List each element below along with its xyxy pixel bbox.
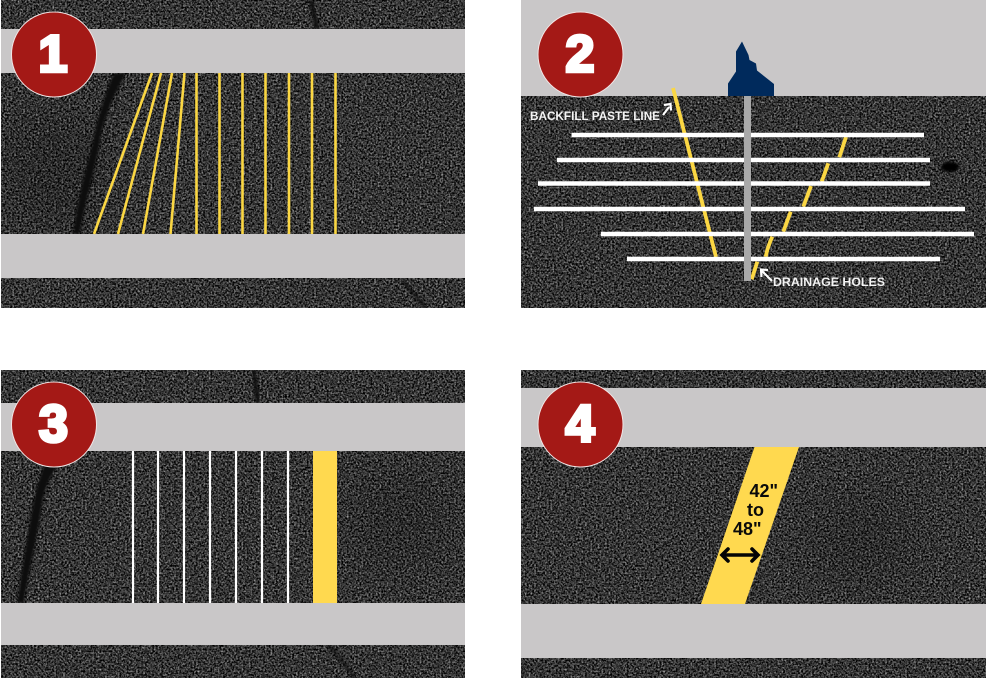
badge: number 3: 3 bbox=[39, 396, 68, 454]
badge: number 3 bbox=[12, 382, 96, 467]
white drill lines bbox=[133, 451, 288, 603]
rock band: upper bbox=[1, 403, 465, 451]
rock band: lower bbox=[1, 603, 465, 645]
yellow filled slot bbox=[313, 451, 337, 603]
badge: number 4 bbox=[538, 382, 623, 467]
icon: navy drill rig bbox=[728, 42, 774, 96]
panel: step 4 bbox=[521, 370, 986, 678]
panel: step 3 bbox=[1, 370, 465, 678]
badge: number 4: 4 bbox=[566, 396, 595, 454]
dimension label bbox=[733, 481, 778, 539]
badge: number 1 bbox=[12, 12, 96, 97]
dimension label: 42" bbox=[750, 481, 778, 501]
dimension label: to bbox=[747, 500, 764, 520]
rock band: upper bbox=[1, 29, 465, 73]
rock band: lower bbox=[1, 234, 465, 278]
label: backfill paste line: BACKFILL PASTE LINE bbox=[530, 109, 660, 123]
panel: step 2 bbox=[521, 0, 986, 308]
label: drainage holes: DRAINAGE HOLES bbox=[773, 275, 885, 289]
badge: number 2: 2 bbox=[566, 26, 594, 84]
label: backfill paste line bbox=[530, 104, 671, 123]
rock band: upper bbox=[521, 388, 986, 447]
yellow backfill paste lines bbox=[673, 88, 846, 279]
label: drainage holes bbox=[761, 270, 885, 289]
panel: step 1 bbox=[0, 0, 465, 308]
dimension label: 48" bbox=[733, 519, 762, 539]
yellow slot bbox=[701, 447, 799, 604]
yellow survey lines bbox=[94, 73, 336, 234]
rock band: lower bbox=[521, 604, 986, 658]
double-headed arrow bbox=[722, 549, 758, 561]
white drill holes bbox=[534, 135, 974, 259]
badge: number 2 bbox=[538, 12, 623, 97]
badge: number 1: 1 bbox=[39, 26, 67, 84]
rock band: top bbox=[521, 0, 986, 96]
drain pipe bbox=[744, 96, 751, 281]
